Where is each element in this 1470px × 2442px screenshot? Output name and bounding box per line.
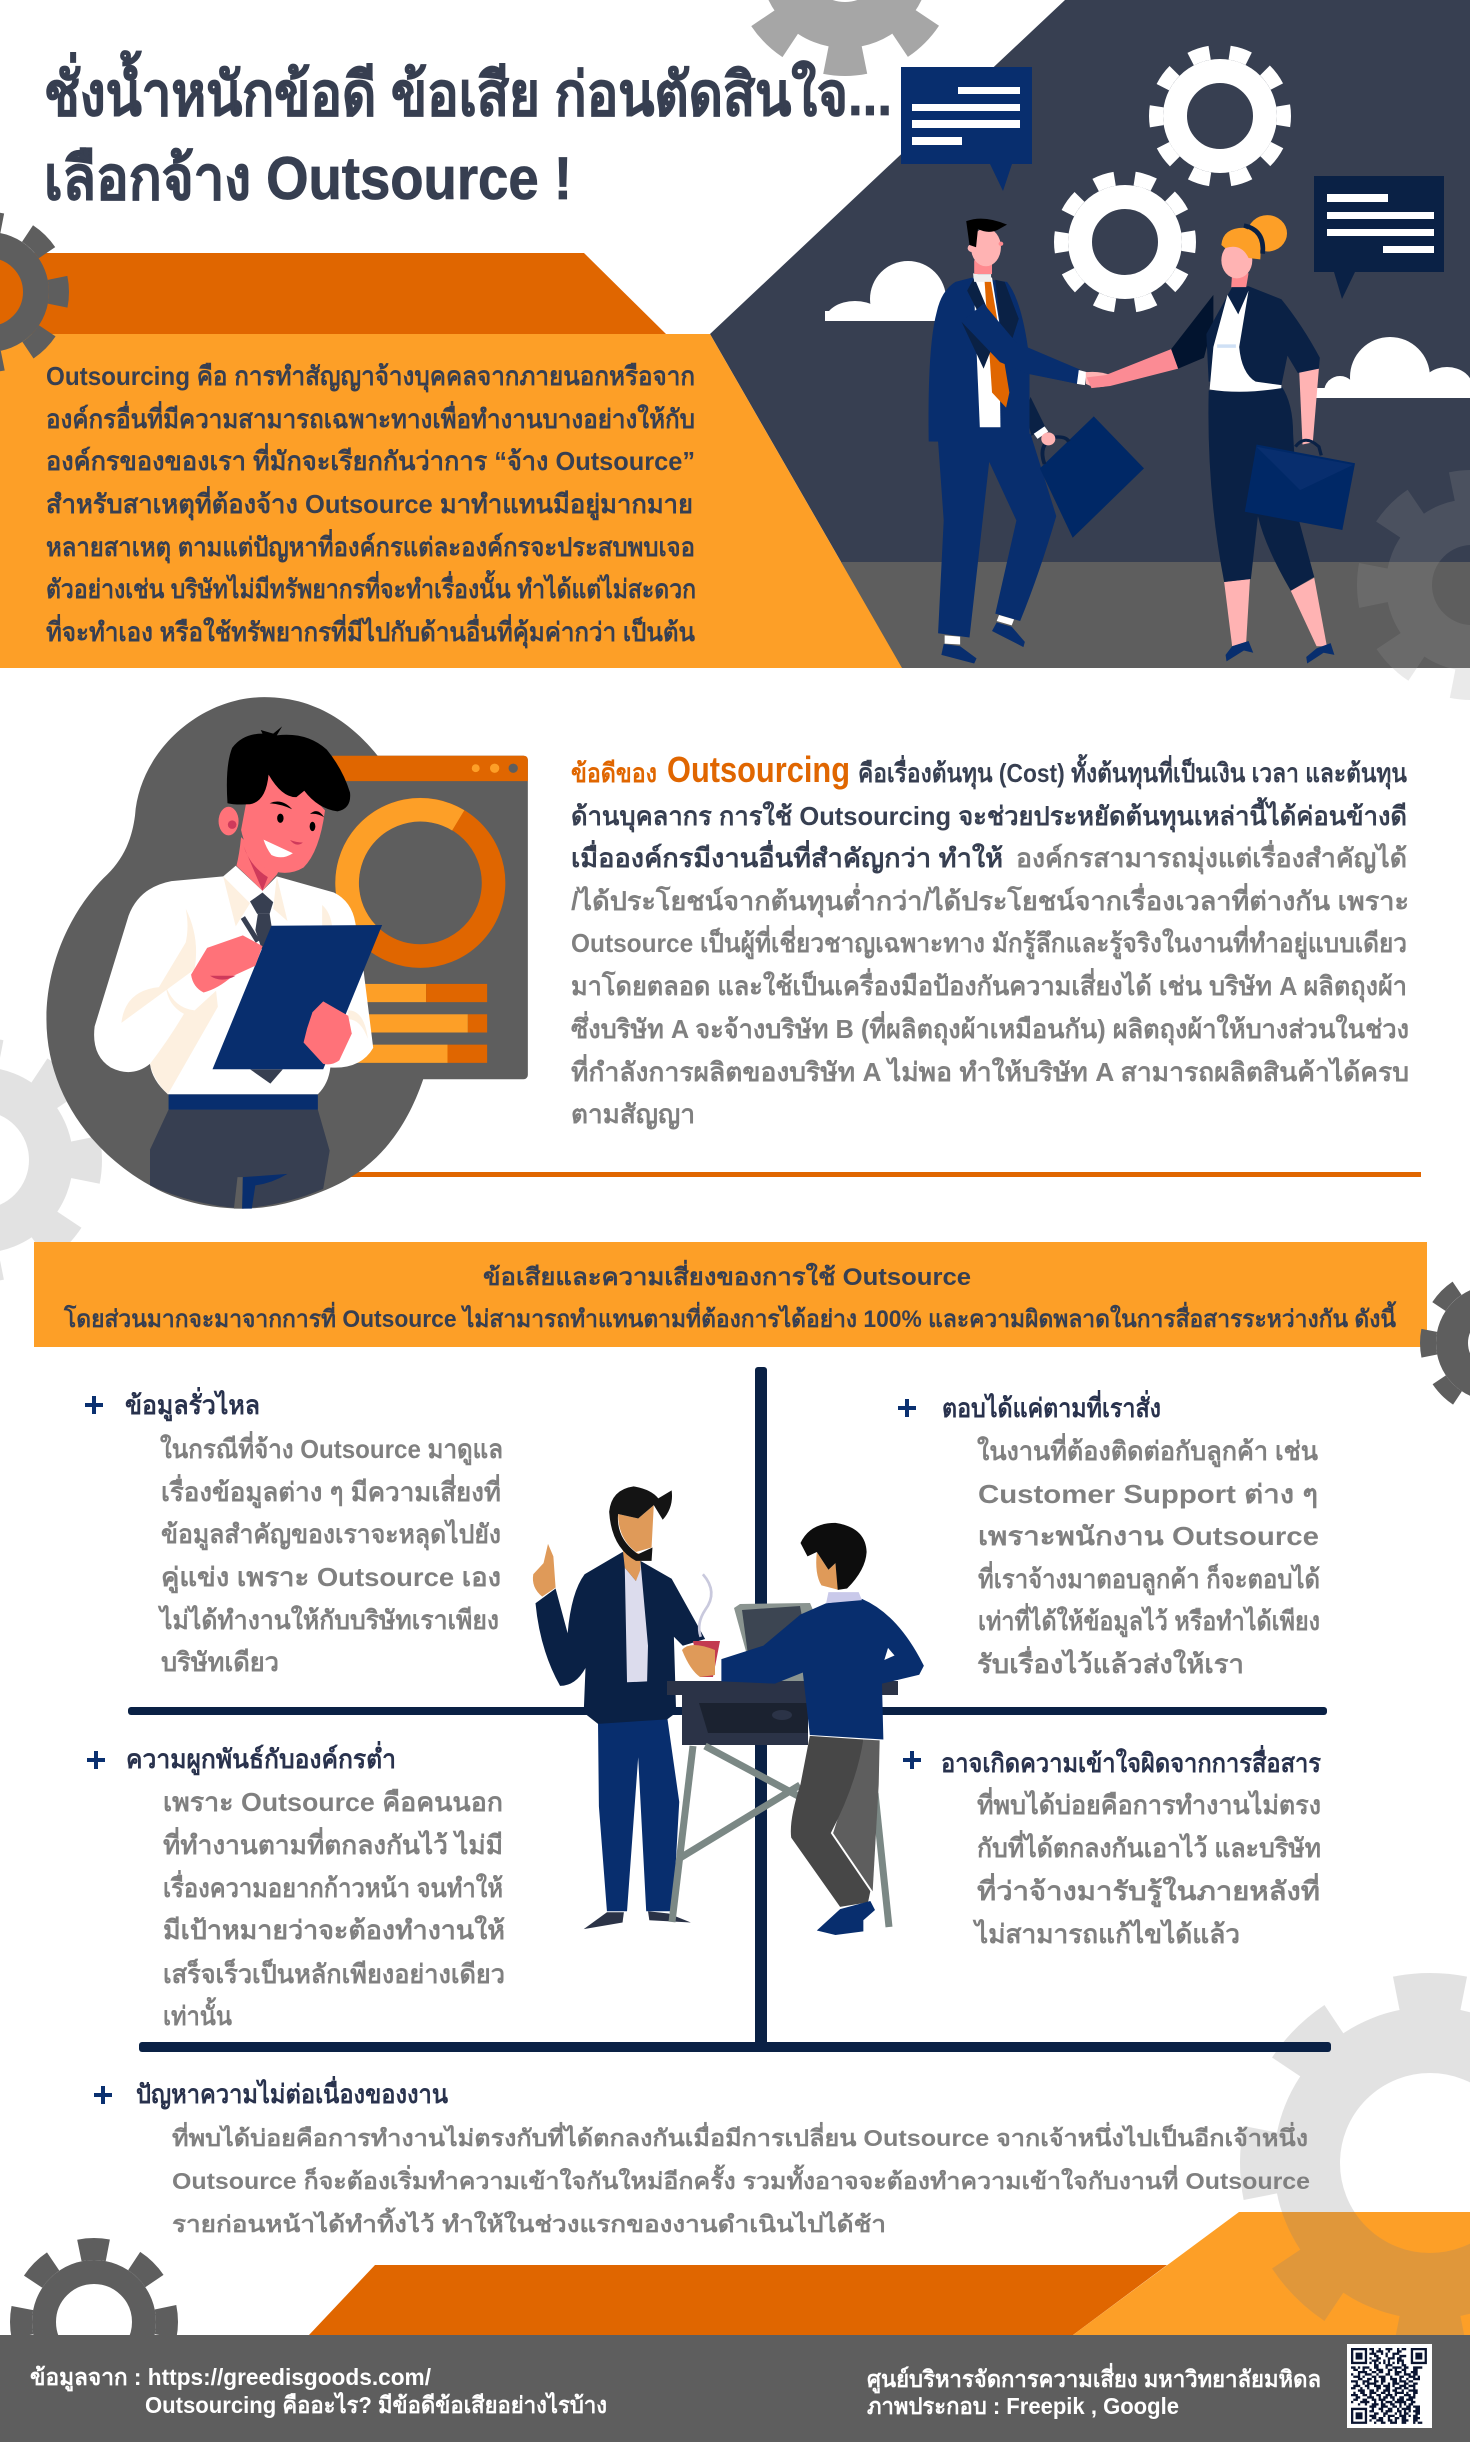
text: source [30, 2364, 607, 2418]
text: source: Outsourcing คืออะไร? มีข้อดีข้อเสียอย่างไรบ้าง [145, 2391, 607, 2418]
icon: plus [85, 1396, 103, 1414]
text block: advantages: องค์กรสามารถมุ่งแต่เรื่องสำคัญได้ [1016, 839, 1407, 875]
text: credits: ภาพประกอบ : Freepik , Google [867, 2393, 1179, 2419]
item: only answers as told: รับเรื่องไว้แล้วส่งให้เรา [977, 1645, 1244, 1679]
banner: disadvantages heading: โดยส่วนมากจะมาจากการที่ Outsource ไม่สามารถทำแทนตามที่ต้องการได้อย่าง 100% และความผิดพลาดในการสื่อสารระหว่างกัน ดังนี้ [63, 1300, 1397, 1333]
text block: outsourcing definition: ที่จะทำเอง หรือใช้ทรัพยากรที่มีไปกับด้านอื่นที่คุ้มค่ากว่า เป็นต้น [46, 613, 695, 649]
banner: disadvantages heading: ข้อเสียและความเสี่ยงของการใช้ Outsource [483, 1259, 971, 1291]
icon: cloud right [1300, 337, 1470, 430]
icon: large faint gear bottom right [1258, 1991, 1470, 2335]
icon: faint gear hero right [1372, 485, 1470, 685]
item: data leak: ไม่ได้ทำงานให้กับบริษัทเราเพียง [157, 1604, 499, 1635]
item: low commitment: ความผูกพันธ์กับองค์กรต่ำ [126, 1740, 396, 1776]
icon: speech bubble right [1314, 176, 1444, 299]
icon: faint gear left [0, 1053, 87, 1267]
icon: plus [903, 1751, 921, 1769]
text block: advantages: Outsourcing [667, 749, 850, 790]
text block: advantages: /ได้ประโยชน์จากต้นทุนต่ำกว่า/ได้ประโยชน์จากเรื่องเวลาที่ต่างกัน เพราะ [571, 882, 1409, 918]
icon: white gear upper [1156, 52, 1284, 180]
item: discontinuity [94, 2075, 1310, 2237]
icon: top grey gear [750, 0, 940, 58]
text block: outsourcing definition: ตัวอย่างเช่น บริษัทไม่มีทรัพยากรที่จะทำเรื่องนั้น ทำได้แต่ไม่สะดวก [46, 569, 696, 604]
text block: advantages: เมื่อองค์กรมีงานอื่นที่สำคัญกว่า ทำให้ [571, 839, 1003, 874]
item: discontinuity: Outsource ก็จะต้องเริ่มทำความเข้าใจกันใหม่อีกครั้ง รวมทั้งอาจจะต้องทำความเข้าใจกับงานที่ Outsource [172, 2164, 1310, 2194]
icon: bottom left gear [21, 2249, 167, 2395]
item: data leak: บริษัทเดียว [161, 1647, 279, 1677]
trousers [150, 1110, 330, 1209]
dashboard window [332, 756, 528, 1079]
item: data leak: ข้อมูลรั่วไหล [125, 1386, 260, 1422]
item: only answers as told: Customer Support ต่าง ๆ [978, 1479, 1318, 1509]
panel: orange intro background [0, 253, 902, 668]
blob background [46, 697, 423, 1209]
item: low commitment [87, 1740, 505, 2031]
illustration: businessman handshake [929, 219, 1144, 664]
text: source: ข้อมูลจาก : https://greedisgoods.com/ [30, 2364, 432, 2392]
icon: left gear on orange band [0, 222, 59, 362]
item: discontinuity: รายก่อนหน้าได้ทำทิ้งไว้ ทำให้ในช่วงแรกของงานดำเนินไปได้ช้า [172, 2207, 886, 2237]
icon: white gear lower [1061, 178, 1189, 306]
item: low commitment: เรื่องความอยากก้าวหน้า จนทำให้ [163, 1869, 503, 1903]
clipboard [212, 925, 382, 1069]
panel: bottom orange shapes [309, 2212, 1470, 2335]
text block: outsourcing definition [46, 361, 696, 649]
text block: outsourcing definition: องค์กรอื่นที่มีความสามารถเฉพาะทางเพื่อทำงานบางอย่างให้กับ [46, 400, 695, 434]
text block: advantages: ข้อดีของ [571, 758, 657, 788]
divider line orange [340, 1172, 1421, 1177]
title: เลือกจ้าง Outsource ! [44, 145, 572, 212]
text block: outsourcing definition: สำหรับสาเหตุที่ต้องจ้าง Outsource มาทำแทนมีอยู่มากมาย [46, 485, 693, 521]
illustration: standing table with laptop [667, 1603, 898, 1927]
item: only answers as told: ที่เราจ้างมาตอบลูกค้า ก็จะตอบได้ [978, 1560, 1320, 1596]
illustration: man with clipboard and dashboard [46, 697, 528, 1209]
text block: outsourcing definition: หลายสาเหตุ ตามแต่ปัญหาที่องค์กรแต่ละองค์กรจะประสบพบเจอ [46, 528, 695, 564]
item: data leak: ในกรณีที่จ้าง Outsource มาดูแล [160, 1430, 503, 1466]
title: ชั่งน้ำหนักข้อดี ข้อเสีย ก่อนตัดสินใจ... [44, 50, 892, 128]
item: only answers as told: เพราะพนักงาน Outsource [978, 1521, 1319, 1551]
banner: disadvantages heading [34, 1242, 1427, 1347]
text block: advantages: ตามสัญญา [571, 1099, 695, 1130]
item: only answers as told: เท่าที่ได้ให้ข้อมูลไว้ หรือทำได้เพียง [978, 1602, 1320, 1638]
text block: advantages: Outsource เป็นผู้ที่เชี่ยวชาญเฉพาะทาง มักรู้ลึกและรู้จริงในงานที่ทำอยู่แบบเดียว [571, 924, 1407, 960]
item: discontinuity: ที่พบได้บ่อยคือการทำงานไม่ตรงกับที่ได้ตกลงกันเมื่อมีการเปลี่ยน Outsource จากเจ้าหนึ่งไปเป็นอีกเจ้าหนึ่ง [172, 2121, 1308, 2151]
item: low commitment: เท่านั้น [163, 1996, 232, 2031]
chart: cross divider lines [128, 1367, 1331, 2052]
item: miscommunication: ไม่สามารถแก้ไขได้แล้ว [972, 1918, 1240, 1949]
item: miscommunication: ที่พบได้บ่อยคือการทำงานไม่ตรง [977, 1786, 1321, 1820]
item: miscommunication [903, 1744, 1321, 1949]
icon: plus [898, 1399, 916, 1417]
text block: advantages: คือเรื่องต้นทุน (Cost) ทั้งต้นทุนที่เป็นเงิน เวลา และต้นทุน [858, 753, 1407, 790]
item: only answers as told: ตอบได้แค่ตามที่เราสั่ง [942, 1389, 1161, 1423]
illustration: standing man with coffee [533, 1486, 711, 1929]
item: low commitment: ที่ทำงานตามที่ตกลงกันไว้ ไม่มี [163, 1826, 503, 1860]
text block: outsourcing definition: องค์กรของของเรา ที่มักจะเรียกกันว่าการ “จ้าง Outsource” [46, 442, 695, 476]
item: data leak: เรื่องข้อมูลต่าง ๆ มีความเสี่ยงที่ [161, 1473, 501, 1509]
icon: plus [87, 1751, 105, 1769]
text block: advantages: ที่กำลังการผลิตของบริษัท A ไม่พอ ทำให้บริษัท A สามารถผลิตสินค้าได้ครบ [571, 1053, 1409, 1087]
item: discontinuity: ปัญหาความไม่ต่อเนื่องของงาน [136, 2075, 448, 2110]
item: miscommunication: กับที่ได้ตกลงกันเอาไว้ และบริษัท [977, 1829, 1321, 1863]
item: miscommunication: ที่ว่าจ้างมารับรู้ในภายหลังที่ [977, 1872, 1320, 1908]
panel: footer [0, 2335, 1470, 2442]
item: low commitment: เสร็จเร็วเป็นหลักเพียงอย่างเดียว [163, 1958, 505, 1989]
shirt [94, 866, 373, 1094]
item: data leak [85, 1386, 503, 1677]
text block: outsourcing definition: Outsourcing คือ การทำสัญญาจ้างบุคคลจากภายนอกหรือจาก [46, 361, 695, 393]
icon: speech bubble left [901, 67, 1032, 191]
item: low commitment: มีเป้าหมายว่าจะต้องทำงานให้ [163, 1915, 505, 1945]
item: data leak: คู่แข่ง เพราะ Outsource เอง [161, 1562, 501, 1594]
hands [191, 935, 262, 992]
text block: advantages: มาโดยตลอด และใช้เป็นเครื่องมือป้องกันความเสี่ยงได้ เช่น บริษัท A ผลิตถุงผ้า [571, 967, 1407, 1003]
text: credits: ศูนย์บริหารจัดการความเสี่ยง มหาวิทยาลัยมหิดล [867, 2362, 1321, 2394]
illustration: man at laptop from behind [721, 1523, 924, 1935]
icon: QR code [1347, 2344, 1432, 2428]
title [44, 50, 892, 212]
icon: dark gear right of banner [1428, 1277, 1470, 1409]
icon: plus [94, 2086, 112, 2104]
head [236, 837, 286, 891]
item: low commitment: เพราะ Outsource คือคนนอก [163, 1787, 503, 1817]
text block: advantages: ซึ่งบริษัท A จะจ้างบริษัท B (ที่ผลิตถุงผ้าเหมือนกัน) ผลิตถุงผ้าให้บางส่วนในช่วง [571, 1010, 1409, 1046]
tie and pen [250, 892, 273, 914]
text block: advantages: ด้านบุคลากร การใช้ Outsourcing จะช่วยประหยัดต้นทุนเหล่านี้ได้ค่อนข้างดี [571, 796, 1407, 833]
item: miscommunication: อาจเกิดความเข้าใจผิดจากการสื่อสาร [941, 1744, 1321, 1778]
item: only answers as told: ในงานที่ต้องติดต่อกับลูกค้า เช่น [977, 1432, 1318, 1468]
item: only answers as told [898, 1389, 1320, 1679]
panel: hero dark background [710, 0, 1470, 668]
text: credits [867, 2362, 1321, 2419]
illustration: businesswoman handshake [1087, 215, 1355, 664]
item: data leak: ข้อมูลสำคัญของเราจะหลุดไปยัง [161, 1518, 501, 1551]
text block: advantages [571, 749, 1409, 1130]
icon: cloud left [820, 261, 960, 351]
